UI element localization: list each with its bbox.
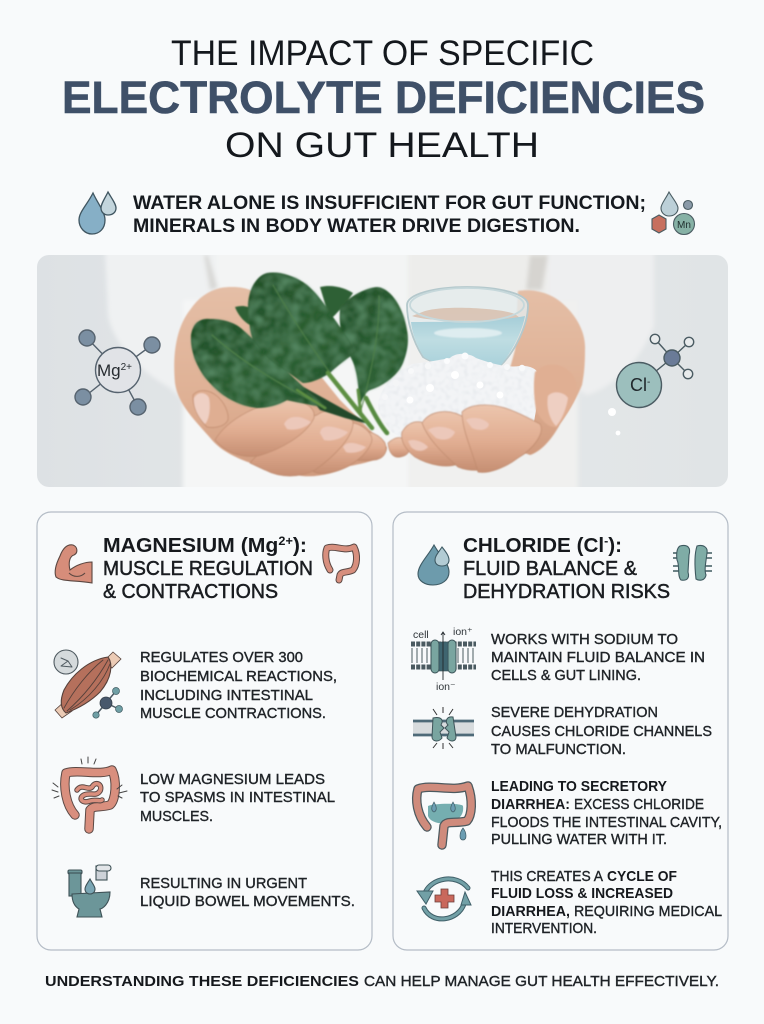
text: leading to secretory diarrhea: PULLING WATER WITH IT.	[491, 831, 667, 848]
text: leading to secretory diarrhea: FLOODS THE INTESTINAL CAVITY,	[491, 814, 722, 831]
text: regulates: INCLUDING INTESTINAL	[140, 687, 313, 704]
heading: chloride: DEHYDRATION RISKS	[463, 581, 670, 603]
subtitle: WATER ALONE IS INSUFFICIENT FOR GUT FUNCTION;	[133, 192, 646, 214]
icon: spasming intestine	[52, 757, 127, 829]
text: leading to secretory diarrhea: LEADING TO SECRETORY	[491, 778, 667, 795]
text: leading to secretory diarrhea	[491, 778, 722, 848]
text: low magnesium: TO SPASMS IN INTESTINAL	[140, 789, 335, 806]
heading: magnesium: MAGNESIUM (Mg	[103, 535, 269, 557]
title: ON GUT HEALTH	[225, 126, 539, 165]
icon: chloride molecule	[608, 334, 694, 435]
text: works with sodium: MAINTAIN FLUID BALANCE IN	[491, 649, 705, 666]
heading: chloride: ):	[608, 535, 622, 557]
text: regulates	[140, 649, 337, 722]
footer	[45, 973, 719, 990]
text: works with sodium: WORKS WITH SODIUM TO	[491, 631, 678, 648]
icon: minerals	[652, 192, 694, 234]
icon: cell membrane channel: ion⁻	[436, 681, 456, 693]
title: ELECTROLYTE DEFICIENCIES	[62, 72, 705, 123]
text: cycle of fluid loss	[491, 868, 722, 937]
icon: cycle with medical cross	[417, 879, 471, 919]
footer: UNDERSTANDING THESE DEFICIENCIES	[45, 973, 359, 990]
icon: flexed arm	[55, 545, 92, 583]
panel: chloride	[393, 512, 728, 950]
fingers	[358, 432, 387, 462]
white coat	[105, 250, 654, 495]
text: regulates: REGULATES OVER 300	[140, 649, 303, 666]
spinach leaves	[191, 272, 408, 433]
title	[62, 34, 705, 165]
text: works with sodium	[491, 631, 705, 684]
right hand back	[510, 290, 586, 456]
heading: magnesium	[103, 534, 313, 603]
text: cycle of fluid loss: DIARRHEA,	[491, 903, 570, 920]
text: leading to secretory diarrhea: DIARRHEA:	[491, 796, 570, 813]
text: resulting: RESULTING IN URGENT	[140, 875, 307, 892]
icon: broken channel	[413, 707, 474, 749]
heading: chloride: -	[604, 534, 608, 548]
heading: chloride: CHLORIDE (Cl	[463, 535, 600, 557]
subtitle: MINERALS IN BODY WATER DRIVE DIGESTION.	[133, 215, 580, 237]
text: cycle of fluid loss: INTERVENTION.	[491, 920, 597, 937]
text: cycle of fluid loss: REQUIRING MEDICAL	[574, 903, 722, 920]
text: cycle of fluid loss: THIS CREATES A	[491, 868, 603, 885]
title: THE IMPACT OF SPECIFIC	[171, 34, 594, 73]
text: resulting	[140, 875, 355, 910]
text: resulting: LIQUID BOWEL MOVEMENTS.	[140, 893, 355, 910]
heading: magnesium: & CONTRACTIONS	[103, 581, 278, 603]
panel: photo of hands holding spinach, water and salt	[37, 250, 728, 495]
icon: toilet	[68, 865, 111, 917]
icon: magnesium molecule: Mg	[97, 361, 121, 380]
icon: cell membrane channel	[411, 626, 476, 693]
text: severe dehydration: TO MALFUNCTION.	[491, 741, 626, 758]
text: severe dehydration: CAUSES CHLORIDE CHANNELS	[491, 723, 712, 740]
text: low magnesium: LOW MAGNESIUM LEADS	[140, 771, 325, 788]
text: regulates: BIOCHEMICAL REACTIONS,	[140, 668, 337, 685]
salt pile	[382, 352, 537, 432]
heading: magnesium: 2+	[278, 534, 293, 548]
subtitle	[133, 192, 646, 237]
text: low magnesium: MUSCLES.	[140, 808, 213, 825]
text: cycle of fluid loss: FLUID LOSS & INCREASED	[491, 885, 673, 902]
heading: magnesium: MUSCLE REGULATION	[103, 558, 313, 580]
heading: chloride: FLUID BALANCE &	[463, 558, 638, 580]
icon: magnesium molecule	[75, 330, 160, 415]
thumb	[193, 391, 228, 427]
icon: channel	[673, 545, 712, 580]
icon: chloride molecule: Cl	[630, 375, 647, 395]
text: works with sodium: CELLS & GUT LINING.	[491, 667, 641, 684]
heading: chloride	[463, 534, 670, 603]
heading: magnesium: ):	[293, 535, 307, 557]
panel: magnesium	[37, 512, 372, 950]
icon: magnesium molecule: 2+	[121, 362, 132, 373]
footer: CAN HELP MANAGE GUT HEALTH EFFECTIVELY.	[364, 973, 719, 990]
text: leading to secretory diarrhea: EXCESS CHLORIDE	[574, 796, 704, 813]
icon: minerals: Mn	[677, 220, 691, 231]
right hand fingers	[388, 364, 577, 472]
icon: colon	[326, 547, 357, 580]
text: low magnesium	[140, 771, 335, 825]
icon: chloride drops	[418, 545, 449, 585]
text: cycle of fluid loss: CYCLE OF	[607, 868, 677, 885]
icon: colon with water	[417, 786, 471, 845]
icon: cell membrane channel: ion⁺	[453, 626, 473, 638]
icon: chloride molecule: -	[647, 377, 650, 388]
icon: water drops	[79, 192, 116, 234]
left hand	[174, 287, 387, 476]
text: severe dehydration	[491, 704, 712, 758]
glass of water	[407, 287, 528, 369]
icon: cell membrane channel: cell	[413, 629, 429, 641]
icon: muscle with molecule	[54, 650, 122, 718]
text: regulates: MUSCLE CONTRACTIONS.	[140, 705, 326, 722]
text: severe dehydration: SEVERE DEHYDRATION	[491, 704, 658, 721]
